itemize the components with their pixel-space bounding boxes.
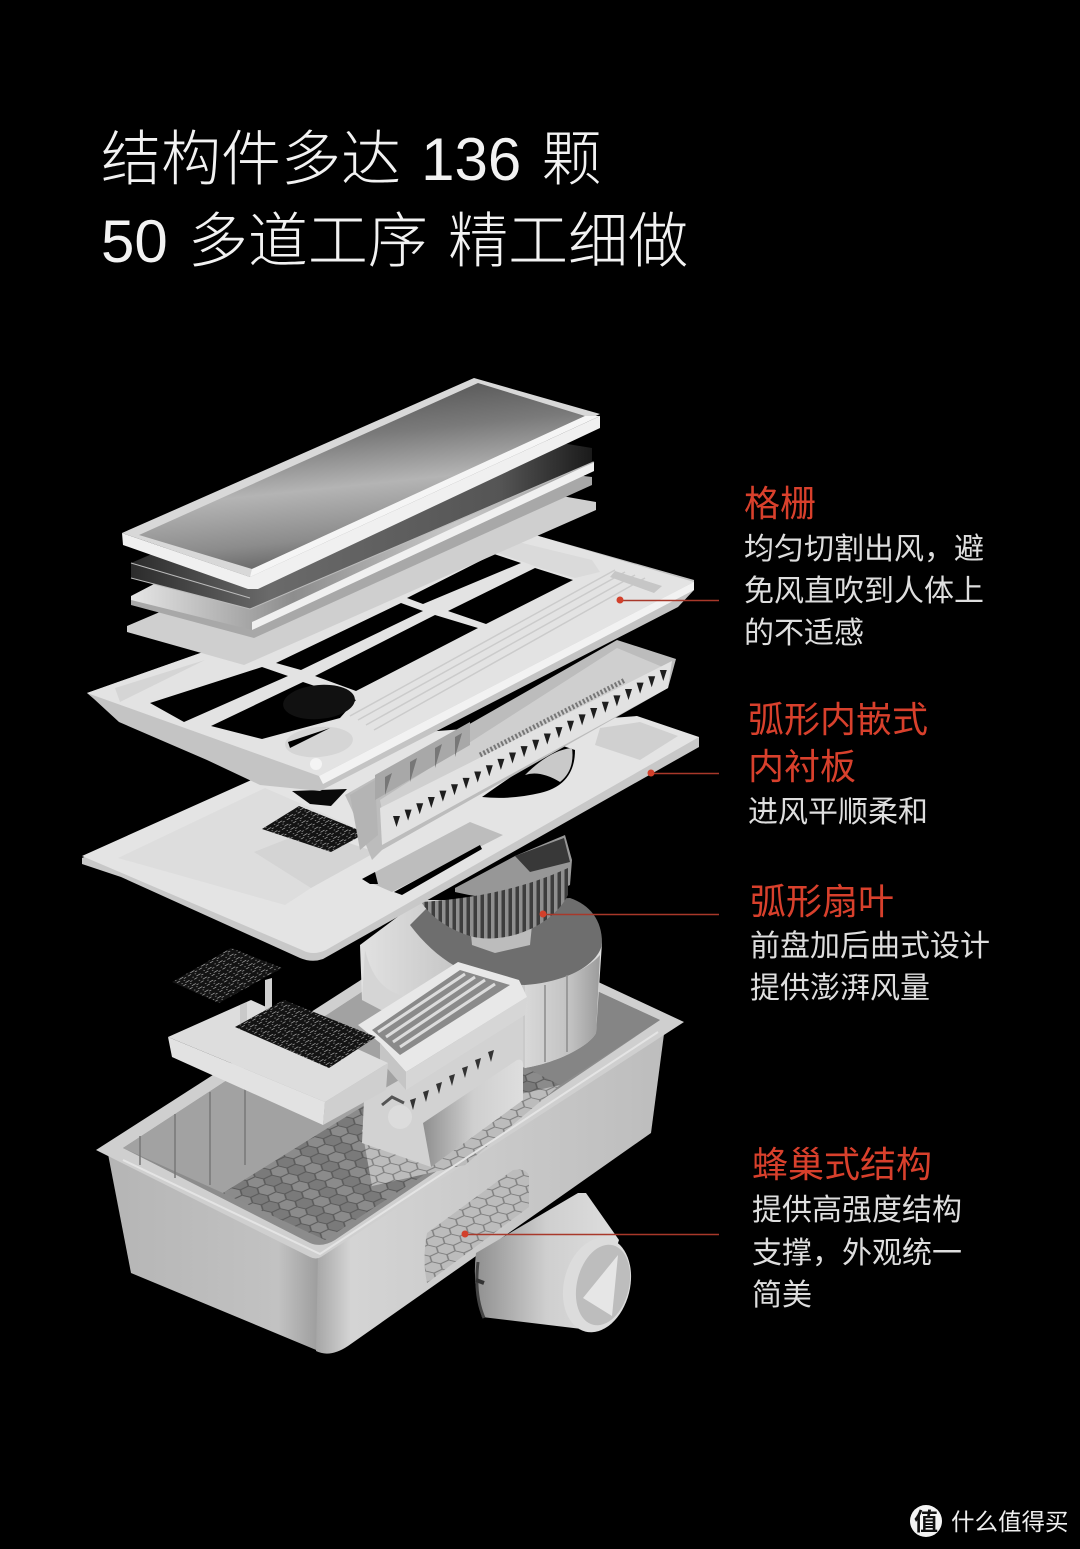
part: white edge strip <box>252 462 594 630</box>
callout: honeycomb structure: 简美 <box>752 1279 812 1312</box>
part: backing plate <box>127 480 596 665</box>
part: heater block and outlet <box>358 962 527 1167</box>
part: electronics housing <box>168 978 388 1125</box>
callout: curved liner <box>748 699 928 829</box>
part: grille plate <box>87 535 694 791</box>
title <box>101 126 688 275</box>
part: box side window <box>424 1170 529 1283</box>
title: 结构件多达 136 颗 <box>101 126 601 193</box>
part: small circuit board on liner <box>262 806 366 852</box>
callout: honeycomb structure <box>752 1144 962 1312</box>
part: channel box with teeth <box>292 640 676 860</box>
part: upper steel plate <box>131 430 594 630</box>
callout: honeycomb structure: 支撑，外观统一 <box>752 1237 962 1270</box>
callout: grille: 格栅 <box>744 483 816 524</box>
part: scroll fan housing <box>360 898 602 1068</box>
callout: curved fan blade: 前盘加后曲式设计 <box>750 930 990 963</box>
callout: grille: 的不适感 <box>744 617 864 650</box>
callout: curved fan blade: 弧形扇叶 <box>750 881 894 922</box>
part: bottom box <box>96 917 684 1354</box>
part: lower steel plate <box>131 460 592 638</box>
callout line: honeycomb <box>462 1230 719 1238</box>
part: round outlet duct <box>475 1193 641 1340</box>
callout: curved liner: 弧形内嵌式 <box>748 699 928 740</box>
part: fan wheel <box>421 835 572 953</box>
callout: curved liner: 进风平顺柔和 <box>748 796 928 829</box>
part: glass sheets <box>131 425 594 609</box>
callout line: fan blade <box>540 910 719 918</box>
watermark logo <box>910 1505 1068 1537</box>
watermark logo: 什么值得买 <box>951 1509 1068 1535</box>
watermark logo: 值 <box>914 1509 938 1536</box>
callout: honeycomb structure: 提供高强度结构 <box>752 1194 962 1227</box>
callout: curved fan blade: 提供澎湃风量 <box>750 972 930 1005</box>
part: circuit board lower <box>235 1000 376 1068</box>
callout: honeycomb structure: 蜂巢式结构 <box>752 1144 932 1185</box>
title: 50 多道工序 精工细做 <box>101 208 688 275</box>
grille vent openings <box>150 554 573 739</box>
callout: grille: 免风直吹到人体上 <box>744 575 984 608</box>
part: liner plate <box>82 716 699 961</box>
callout: grille <box>744 483 984 650</box>
callout line: grille <box>616 596 719 604</box>
product: exploded heater diagram <box>82 378 699 1354</box>
callout: grille: 均匀切割出风，避 <box>744 533 984 566</box>
part: top frame <box>122 378 600 589</box>
callout: curved fan blade <box>750 881 990 1005</box>
callout: curved liner: 内衬板 <box>748 746 856 787</box>
callout line: liner <box>648 770 719 776</box>
part: circuit board upper <box>172 948 282 1003</box>
